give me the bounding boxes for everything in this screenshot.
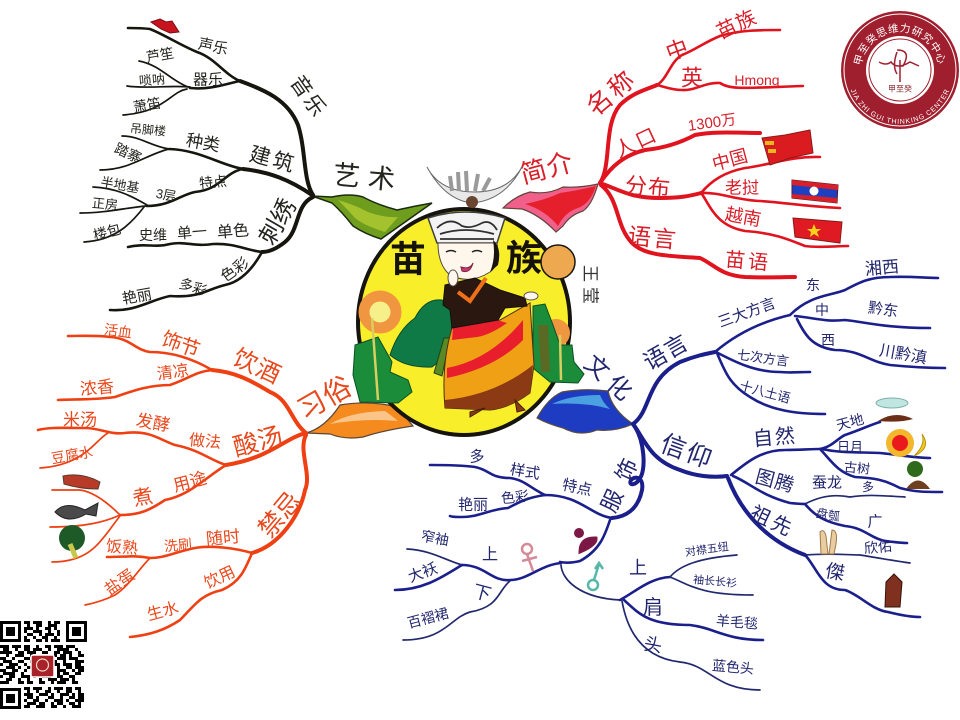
black branch labels: 特点 xyxy=(198,173,228,191)
black branch labels: 刺绣 xyxy=(254,194,302,250)
QR center logo xyxy=(31,655,54,677)
black branch labels: 芦笙 xyxy=(145,45,175,65)
black branch labels xyxy=(91,35,404,308)
blue branch labels: 艳丽 xyxy=(458,496,488,514)
black branch labels: 单一 xyxy=(176,223,208,243)
icon: vegetable xyxy=(59,525,85,558)
orange branch labels: 洗刷 xyxy=(163,536,193,554)
blue ribbon xyxy=(537,390,633,433)
icon: red lips xyxy=(151,19,179,33)
icon: tablet xyxy=(885,574,902,607)
flag disc xyxy=(810,186,818,196)
black branch labels: 3层 xyxy=(155,186,177,204)
flag stars xyxy=(765,141,776,153)
blue branch labels: 欣佑 xyxy=(863,538,893,556)
person body xyxy=(580,538,596,552)
red branch labels: 越南 xyxy=(724,204,762,230)
flag stripes xyxy=(792,180,838,203)
collar xyxy=(458,278,486,301)
black branch labels: 半地基 xyxy=(99,174,141,196)
blue branch labels: 语言 xyxy=(639,329,693,375)
icon: meat xyxy=(63,475,100,489)
black branch labels: 史维 xyxy=(139,227,167,243)
hat knob xyxy=(466,196,478,208)
green hill xyxy=(390,300,452,367)
blue branch labels: 上 xyxy=(482,546,498,564)
black branch labels: 正房 xyxy=(91,195,119,213)
blue branch labels: 七次方言 xyxy=(736,347,790,369)
branch: 简介 (red) xyxy=(503,5,848,277)
fern on right xyxy=(538,325,550,372)
orange branch labels: 清凉 xyxy=(156,361,190,384)
bamboo stalk by skirt xyxy=(434,338,450,376)
red branch labels: 苗族 xyxy=(713,5,761,44)
skirt base xyxy=(444,303,534,410)
blue branch labels: 西 xyxy=(821,332,835,348)
red branch labels: 苗语 xyxy=(724,248,772,275)
orange branch labels xyxy=(50,321,358,624)
blue branch labels: 特点 xyxy=(561,477,593,499)
orange branch labels: 做法 xyxy=(188,431,222,452)
blue branch labels: 黔东 xyxy=(867,299,899,321)
black branch labels: 艺术 xyxy=(332,160,404,196)
icon: Vietnam flag xyxy=(793,218,842,243)
black branch labels: 器乐 xyxy=(193,72,223,88)
red branch labels: 人口 xyxy=(611,122,662,163)
bamboo poles xyxy=(372,318,561,400)
orange branch labels: 盐蛋 xyxy=(101,566,138,599)
skirt brown hem xyxy=(445,365,533,410)
red branch labels: 中 xyxy=(662,34,692,66)
blue branch labels: 三大方言 xyxy=(716,295,778,331)
orange branch labels: 煮 xyxy=(131,484,155,511)
icon: male symbol xyxy=(588,563,603,590)
icon: clouds and earth xyxy=(876,398,913,422)
blue branch labels: 多 xyxy=(862,480,874,494)
orange branch labels: 发酵 xyxy=(135,411,171,435)
black branch lines xyxy=(80,28,313,310)
orange branch labels: 饮酒 xyxy=(229,344,285,390)
eyes xyxy=(446,250,482,252)
author name: 王莹 xyxy=(580,265,600,309)
red branch labels: 名称 xyxy=(582,64,642,122)
face xyxy=(438,243,498,279)
badge small text: 甲至癸 xyxy=(888,84,912,94)
icon: fish xyxy=(55,503,98,519)
yellow circle xyxy=(358,209,570,435)
blue branch labels: 日月 xyxy=(837,440,863,454)
red branch labels: 简介 xyxy=(517,147,577,189)
red branch lines xyxy=(600,30,848,277)
red branch labels: 语言 xyxy=(627,223,679,253)
orange branch labels: 生水 xyxy=(145,599,181,624)
hat pattern xyxy=(437,221,497,239)
red branch labels: 分布 xyxy=(624,173,672,201)
raised hand xyxy=(448,270,458,286)
earth mound xyxy=(878,415,913,422)
black branch labels: 唢呐 xyxy=(138,71,166,89)
blue branch labels: 上 xyxy=(629,558,647,578)
blue branch labels: 湘西 xyxy=(864,257,900,279)
orange branch labels: 禁忌 xyxy=(253,487,307,543)
black branch labels: 声乐 xyxy=(197,35,230,58)
blue branch labels xyxy=(406,257,928,677)
blue branch labels: 大袄 xyxy=(406,560,440,586)
orange branch labels: 饰节 xyxy=(158,327,202,362)
blue branch labels: 天地 xyxy=(834,411,866,433)
ribbon stripe xyxy=(338,200,398,232)
blue branch labels: 东 xyxy=(806,277,820,293)
horn spikes xyxy=(450,171,490,191)
blue branch labels: 羊毛毯 xyxy=(715,612,759,632)
branch: 文化 (blue) xyxy=(395,257,945,690)
badge outer ring xyxy=(844,14,956,126)
blue branch labels: 文化 xyxy=(579,350,641,410)
blue branch labels: 肩 xyxy=(643,596,663,619)
black branch labels: 萧笛 xyxy=(132,95,162,115)
black branch labels: 单色 xyxy=(216,221,250,242)
skirt middle red band xyxy=(447,320,523,378)
orange branch lines xyxy=(38,336,307,637)
blue branch labels: 自然 xyxy=(752,424,798,451)
blue branch labels: 蚕龙 xyxy=(812,474,842,492)
black jacket xyxy=(443,278,527,328)
blue branch labels: 图腾 xyxy=(753,466,797,497)
orange branch labels: 米汤 xyxy=(63,410,97,430)
black branch labels: 吊脚楼 xyxy=(129,120,167,139)
red branch labels: 1300万 xyxy=(687,111,737,135)
QR modules xyxy=(0,622,84,706)
silver horns xyxy=(427,167,522,203)
ribbon stripe xyxy=(552,395,610,409)
blue branch labels: 广 xyxy=(867,514,883,530)
red branch labels: 老挝 xyxy=(725,178,759,198)
orange branch labels: 浓香 xyxy=(79,377,115,399)
blue branch labels: 信仰 xyxy=(657,430,717,474)
blue branch labels: 盘瓠 xyxy=(815,505,841,524)
icon: China flag xyxy=(762,130,813,165)
title: 苗: 苗 xyxy=(390,238,426,280)
orange ribbon xyxy=(306,403,413,438)
red branch labels: 英 xyxy=(681,66,703,90)
orange branch labels: 随时 xyxy=(205,527,241,549)
blue branch labels: 头 xyxy=(642,634,664,656)
green leaf right xyxy=(533,304,584,383)
blue branch labels: 色彩 xyxy=(500,488,530,506)
blue branch labels: 样式 xyxy=(509,461,541,483)
mouth xyxy=(461,263,473,272)
extended hand xyxy=(524,292,538,300)
vegetable stem xyxy=(70,544,76,558)
flag star xyxy=(807,224,821,237)
blue branch lines xyxy=(395,277,945,690)
blue branch labels: 古树 xyxy=(843,459,871,477)
black branch labels: 楼包 xyxy=(91,221,123,243)
blue branch labels: 百褶裙 xyxy=(406,605,450,631)
branch: 艺术 (black) xyxy=(80,19,432,310)
orange branch labels: 酸汤 xyxy=(230,422,286,462)
icon: tree xyxy=(906,461,930,489)
orange disc lower right xyxy=(542,319,570,347)
icon: female symbol xyxy=(522,544,537,571)
sun core xyxy=(892,435,908,451)
blue branch labels: 对襟五纽 xyxy=(684,539,730,559)
pink ribbon xyxy=(503,184,598,232)
black branch labels: 种类 xyxy=(185,131,221,155)
silver hat xyxy=(428,212,505,243)
branch: 习俗 (orange) xyxy=(38,321,413,637)
orange disc top right xyxy=(541,245,575,279)
skirt top red band xyxy=(452,320,507,340)
QR finder patterns xyxy=(0,621,87,709)
badge disc xyxy=(841,11,959,129)
blue branch labels: 多 xyxy=(469,448,485,466)
red branch labels xyxy=(517,5,780,275)
blue branch labels: 下 xyxy=(471,581,493,605)
orange branch labels: 豆腐水 xyxy=(50,443,94,467)
feet xyxy=(470,400,525,417)
icon: Laos flag xyxy=(792,180,838,203)
orange branch labels: 用途 xyxy=(171,468,209,496)
green ribbon xyxy=(312,195,432,239)
orange branch labels: 活血 xyxy=(103,321,133,341)
badge emblem xyxy=(879,50,919,82)
QR code xyxy=(0,621,87,709)
blue branch labels: 袖长长衫 xyxy=(693,572,738,590)
blue branch labels: 傑 xyxy=(824,560,846,585)
orange ring left xyxy=(364,296,396,328)
black branch labels: 多彩 xyxy=(177,275,209,299)
badge inner disc xyxy=(866,36,934,104)
badge inner ring xyxy=(869,39,931,101)
tree mound xyxy=(906,480,930,489)
hair xyxy=(490,240,499,272)
ribbon stripe xyxy=(525,186,596,226)
icon: person xyxy=(574,528,596,552)
central image: Miao girl in yellow circle xyxy=(353,167,600,435)
badge chinese text: 甲至癸思维力研究中心 xyxy=(853,23,945,64)
badge english text: JIA ZHI GUI THINKING CENTER xyxy=(850,89,950,124)
blue branch labels: 川黔滇 xyxy=(878,341,928,368)
icon: sun and moon xyxy=(886,429,926,457)
blue branch labels: 祖先 xyxy=(747,501,798,542)
black branch labels: 色彩 xyxy=(218,254,252,286)
black branch labels: 音乐 xyxy=(285,72,331,122)
title: 族: 族 xyxy=(506,238,542,278)
orange branch labels: 饮用 xyxy=(201,563,238,592)
orange branch labels: 习俗 xyxy=(292,370,358,426)
moon xyxy=(914,434,926,456)
icon: hands xyxy=(820,530,836,554)
blue branch labels: 十八土语 xyxy=(738,378,792,406)
orange branch labels: 饭熟 xyxy=(105,537,139,558)
blue branch labels: 蓝色头 xyxy=(711,657,755,677)
green leaf left xyxy=(353,337,412,403)
logo badge xyxy=(841,11,959,129)
black branch labels: 建筑 xyxy=(247,143,299,177)
blue branch labels: 中 xyxy=(815,302,829,318)
QR center emblem xyxy=(36,659,48,671)
black branch labels: 艳丽 xyxy=(121,286,153,308)
red branch labels: Hmong xyxy=(734,72,780,88)
red branch labels: 中国 xyxy=(710,146,750,174)
blue branch labels: 窄袖 xyxy=(420,528,450,548)
black branch labels: 踏寨 xyxy=(112,140,144,166)
ribbon stripe xyxy=(330,411,398,424)
blue branch labels: 服饰 xyxy=(596,444,648,516)
